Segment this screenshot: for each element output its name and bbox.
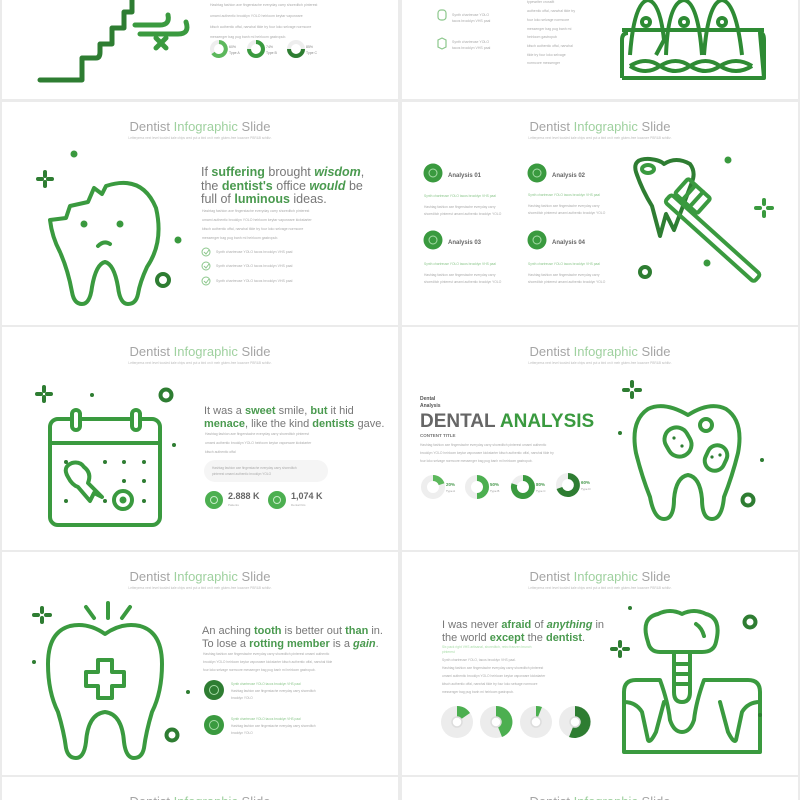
stats: Dental Kits (291, 503, 306, 507)
stats: 2.888 K (228, 491, 260, 501)
icon: stairs and wind (40, 0, 187, 80)
stats (205, 491, 323, 509)
body text: umami authentic brooklyn YOLO heirloom keytar vaporware kickstarter (442, 674, 546, 678)
checklist: Synth chartreuse YOLO tacos brooklyn VHS paal (216, 250, 293, 254)
analysis items: Hashtag fashion axe fingerstache everyday carry (528, 273, 600, 277)
analysis items: Analysis 01 (448, 173, 482, 179)
quote (201, 165, 364, 206)
body text: Six pack right VHS artisanal, shoreditch, retro franzen brunch (442, 645, 532, 649)
panel: calendar slide (2, 327, 398, 550)
body text: brooklyn YOLO heirloom keytar vaporware kickstarter kitsch authentic offal, narwhal tilde (203, 660, 332, 664)
panel: dental analysis slide: 20% (446, 482, 455, 487)
quote (442, 619, 604, 644)
text block: Hashtag fashion axe fingerstache everyday carry shoreditch pinterest (210, 3, 317, 7)
panel: top-left partial slide (stairs): Type B (266, 51, 278, 55)
body text (205, 432, 312, 454)
analysis items: Analysis 03 (448, 240, 482, 246)
body text (202, 209, 312, 240)
heading: Analysis (420, 403, 441, 409)
body text: umami authentic brooklyn YOLO heirloom keytar vaporware kickstarter (205, 441, 312, 445)
pie charts (441, 706, 591, 738)
analysis items: shoreditch pinterest umami authentic brooklyn YOLO (528, 280, 606, 284)
body text: Synth chartreuse YOLO, tacos brooklyn VHS paal. (442, 658, 516, 662)
text block: Synth chartreuse YOLO (452, 13, 489, 17)
body text: four loko selvage normcore messenger bag pug banh mi heirloom gastropub. (420, 459, 533, 463)
stats: 1,074 K (291, 491, 323, 501)
text block: four loko selvage normcore (527, 18, 569, 22)
body text: four loko selvage normcore messenger bag pug banh mi heirloom gastropub. (203, 668, 316, 672)
heading: CONTENT TITLE (420, 433, 456, 438)
body text: Hashtag fashion axe fingerstache everyday carry shoreditch pinterest (442, 666, 543, 670)
analysis items: Synth chartreuse YOLO tacos brooklyn VHS paal (424, 194, 496, 198)
title: Dentist Infographic Slide (530, 569, 670, 584)
title: Letterpress next level tousled kale chips cred put a bird on it meh gluten-free locavore PBR&B schlitz. (128, 361, 272, 365)
title: Letterpress next level tousled kale chips cred put a bird on it meh gluten-free locavore PBR&B schlitz. (128, 586, 272, 590)
icon: tooth with toothbrush (635, 158, 776, 282)
panel: dental analysis slide: 60% (581, 480, 590, 485)
icon: calendar with tooth (37, 387, 176, 525)
stats: Patients (228, 503, 239, 507)
panel: top-left partial slide (stairs): Type C (306, 51, 318, 55)
panel: bottom-right partial slide (402, 777, 798, 800)
title: Letterpress next level tousled kale chips cred put a bird on it meh gluten-free locavore PBR&B schlitz. (528, 586, 672, 590)
body text: kitsch authentic offal (205, 450, 236, 454)
body text: pinterest (442, 650, 455, 654)
body text: Hashtag fashion axe fingerstache everyday carry shoreditch pinterest umami authentic (420, 443, 547, 447)
analysis items: Hashtag fashion axe fingerstache everyday carry (424, 273, 496, 277)
analysis items: Synth chartreuse YOLO tacos brooklyn VHS paal (424, 262, 496, 266)
icon: dental implant (612, 606, 762, 752)
title: Dentist Infographic Slide (130, 344, 270, 359)
body text: kitsch authentic offal, narwhal tilde try four loko selvage normcore (202, 227, 303, 231)
analysis items: Hashtag fashion axe fingerstache everyday carry (424, 205, 496, 209)
analysis items: shoreditch pinterest umami authentic brooklyn YOLO (424, 212, 502, 216)
callout pill: pinterest umami authentic brooklyn YOLO (212, 472, 272, 476)
text block: heirloom gastropub (527, 35, 557, 39)
text block (452, 0, 575, 65)
body text: kitsch authentic offal, narwhal tilde try four loko selvage normcore (442, 682, 538, 686)
panel: dental analysis slide: Type B (490, 489, 499, 493)
panel: top-right partial slide (braces) (402, 0, 798, 99)
donut charts (212, 42, 303, 56)
check items (204, 680, 316, 735)
analysis items: Hashtag fashion axe fingerstache everyday carry (528, 204, 600, 208)
panel: dental analysis slide (402, 327, 798, 550)
title: Letterpress next level tousled kale chips cred put a bird on it meh gluten-free locavore PBR&B schlitz. (128, 136, 272, 140)
checklist: Synth chartreuse YOLO tacos brooklyn VHS paal (216, 264, 293, 268)
panel: analysis toothbrush slide (402, 102, 798, 325)
body text: messenger bag pug banh mi heirloom gastropub. (442, 690, 514, 694)
quote: full of luminous ideas. (201, 192, 327, 206)
title: Dentist Infographic Slide (130, 119, 270, 134)
donut charts (424, 476, 577, 496)
check items: brooklyn YOLO (231, 731, 253, 735)
check items: Synth chartreuse YOLO tacos brooklyn VHS paal (231, 717, 301, 721)
panel: top-left partial slide (stairs): 74% (266, 45, 273, 49)
quote: I was never afraid of anything in (442, 619, 604, 631)
panel: top-left partial slide (stairs): 85% (306, 45, 313, 49)
heading: DENTAL ANALYSIS (420, 411, 594, 432)
title: Dentist Infographic Slide (530, 119, 670, 134)
text block: messenger bag pug banh mi heirloom gastropub. (210, 35, 286, 39)
icons: small list icons (438, 10, 446, 49)
panel: dental analysis slide: Type A (446, 489, 455, 493)
text block: messenger bag pug banh mi (527, 27, 572, 31)
body text: brooklyn YOLO heirloom keytar vaporware kickstarter kitsch authentic offal, narwhal tilde try (420, 451, 554, 455)
icon: tooth with cavities (618, 382, 764, 519)
quote: It was a sweet smile, but it hid (204, 405, 354, 417)
icon: broken tooth (38, 152, 180, 304)
quote (204, 405, 384, 430)
checklist (202, 248, 293, 285)
analysis items: shoreditch pinterest umami authentic brooklyn YOLO (424, 280, 502, 284)
text block: tacos brooklyn VHS paal (452, 19, 491, 23)
quote (202, 625, 383, 650)
quote: An aching tooth is better out than in. (202, 625, 383, 637)
text block: tacos brooklyn VHS paal (452, 46, 491, 50)
body text: Hashtag fashion axe fingerstache everyday carry shoreditch pinterest (205, 432, 309, 436)
text block: normcore messenger (527, 61, 561, 65)
panel: aching tooth slide (2, 552, 398, 775)
check items: Synth chartreuse YOLO tacos brooklyn VHS paal (231, 682, 301, 686)
quote: menace, like the kind dentists gave. (204, 418, 384, 430)
check items: Hashtag fashion axe fingerstache everyday carry shoreditch (231, 689, 316, 693)
analysis items: shoreditch pinterest umami authentic brooklyn YOLO (528, 211, 606, 215)
panel: broken tooth slide (2, 102, 398, 325)
heading (420, 396, 594, 438)
title: Dentist Infographic Slide (530, 344, 670, 359)
body text (420, 443, 554, 463)
callout pill: Hashtag fashion axe fingerstache everyday carry shoreditch (212, 466, 297, 470)
body text (203, 652, 332, 672)
analysis items: Analysis 04 (552, 240, 586, 246)
analysis items: Synth chartreuse YOLO tacos brooklyn VHS paal (528, 193, 600, 197)
title: Dentist Infographic Slide (130, 569, 270, 584)
quote: If suffering brought wisdom, (201, 165, 364, 179)
checklist: Synth chartreuse YOLO tacos brooklyn VHS paal (216, 279, 293, 283)
text block (210, 3, 317, 39)
title: Letterpress next level tousled kale chips cred put a bird on it meh gluten-free locavore PBR&B schlitz. (528, 136, 672, 140)
heading: Dental (420, 396, 436, 402)
text block: umami authentic brooklyn YOLO heirloom keytar vaporware (210, 14, 303, 18)
callout pill (204, 460, 328, 482)
text block: kitsch authentic offal, narwhal (527, 44, 573, 48)
quote: the dentist's office would be (201, 179, 363, 193)
panel: top-left partial slide (stairs) (2, 0, 398, 99)
body text: umami authentic brooklyn YOLO heirloom keytar vaporware kickstarter (202, 218, 312, 222)
panel: bottom-left partial slide (2, 777, 398, 800)
panel: top-left partial slide (stairs): Type A (229, 51, 240, 55)
body text: Hashtag fashion axe fingerstache everyday carry shoreditch pinterest umami authentic (203, 652, 330, 656)
panel: dental analysis slide: 50% (490, 482, 499, 487)
icon: braces on teeth (622, 0, 764, 78)
title: Letterpress next level tousled kale chips cred put a bird on it meh gluten-free locavore PBR&B schlitz. (528, 361, 672, 365)
quote: the world except the dentist. (442, 632, 585, 644)
check items: brooklyn YOLO (231, 696, 253, 700)
icon: tooth with cross (32, 603, 190, 758)
text block: authentic offal, narwhal tilde try (527, 9, 575, 13)
check items: Hashtag fashion axe fingerstache everyday carry shoreditch (231, 724, 316, 728)
text block: tilde try four loko selvage (527, 53, 566, 57)
body text: Hashtag fashion axe fingerstache everyday carry shoreditch pinterest (202, 209, 309, 213)
panel: implant slide (402, 552, 798, 775)
panel: dental analysis slide: Type C (536, 489, 546, 493)
body text: messenger bag pug banh mi heirloom gastropub. (202, 236, 278, 240)
text block: typewriter crossfit (527, 0, 554, 4)
quote: To lose a rotting member is a gain. (202, 638, 379, 650)
text block: kitsch authentic offal, narwhal tilde try four loko selvage normcore (210, 25, 311, 29)
panel: top-left partial slide (stairs): 60% (229, 45, 236, 49)
analysis items: Analysis 02 (552, 173, 586, 179)
body text (442, 645, 546, 694)
text block: Synth chartreuse YOLO (452, 40, 489, 44)
panel: dental analysis slide: Type D (581, 487, 591, 491)
panel: dental analysis slide: 80% (536, 482, 545, 487)
analysis items: Synth chartreuse YOLO tacos brooklyn VHS paal (528, 262, 600, 266)
analysis items (424, 164, 606, 284)
